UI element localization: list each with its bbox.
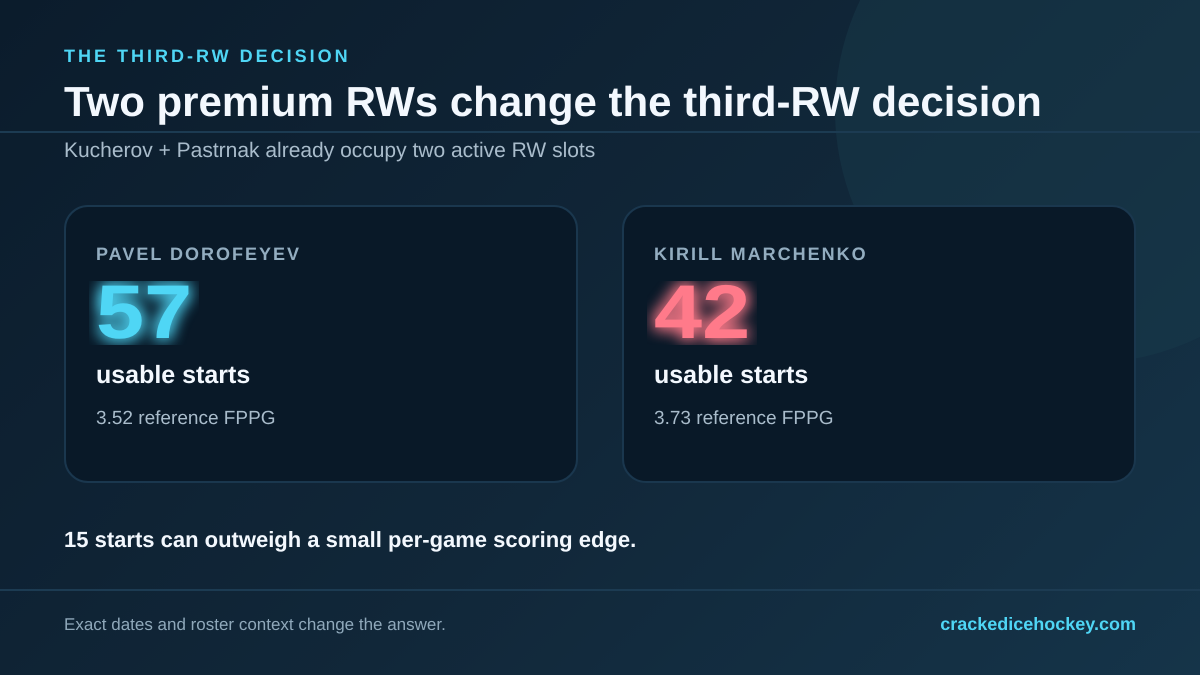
subtitle: Kucherov + Pastrnak already occupy two active RW slots — [64, 139, 595, 162]
player name: PAVEL DOROFEYEV — [96, 244, 301, 264]
panel: Pavel Dorofeyev — [64, 205, 578, 483]
label: usable starts: usable starts — [96, 361, 250, 389]
reference FPPG: 3.52 reference FPPG — [96, 408, 276, 429]
label: usable starts: usable starts — [654, 361, 808, 389]
reference FPPG: 3.73 reference FPPG — [654, 408, 834, 429]
title: Two premium RWs change the third-RW decision — [64, 78, 1042, 125]
panel: Kirill Marchenko — [622, 205, 1136, 483]
takeaway: 15 starts can outweigh a small per-game scoring edge. — [64, 527, 636, 552]
player name: KIRILL MARCHENKO — [654, 244, 868, 264]
background circle — [835, 0, 1200, 363]
footer link: crackedicehockey.com — [940, 614, 1136, 634]
footer note: Exact dates and roster context change the answer. — [64, 615, 446, 634]
eyebrow: THE THIRD-RW DECISION — [64, 46, 351, 66]
